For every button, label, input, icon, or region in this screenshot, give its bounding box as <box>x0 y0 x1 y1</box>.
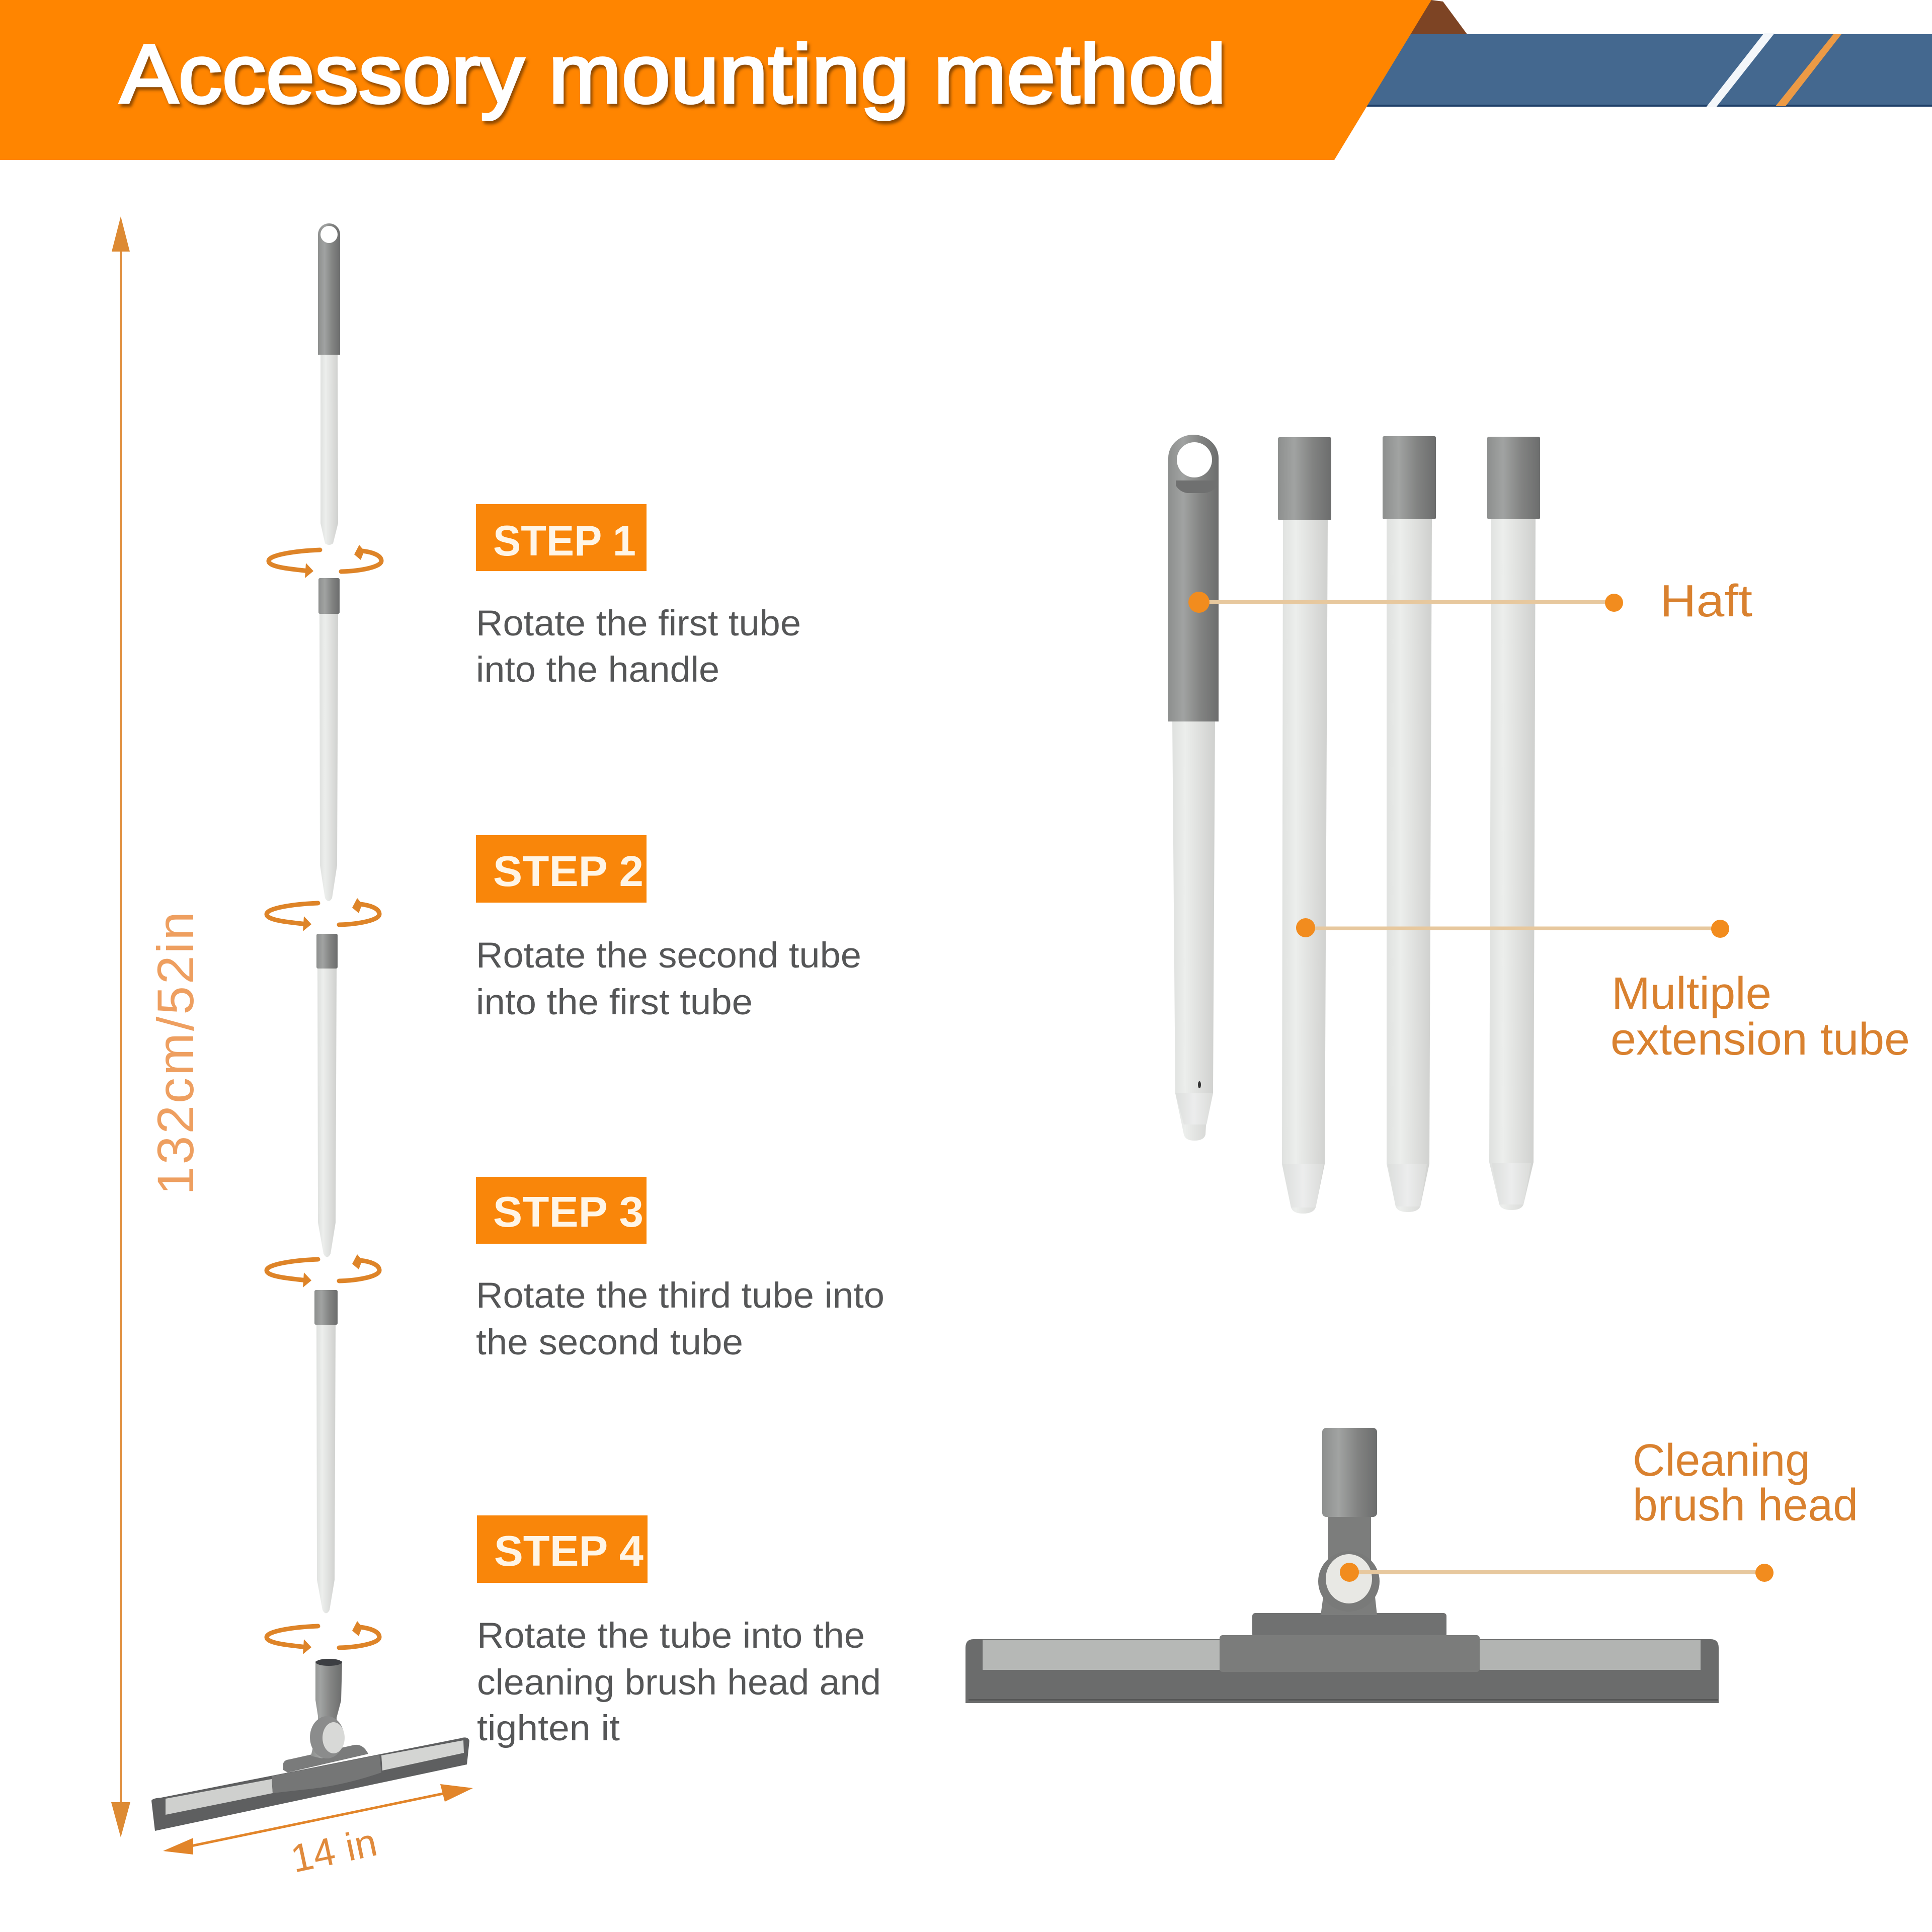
label: multiple extension tube <box>1611 969 1910 1065</box>
step 2: Rotate the second tube <box>476 936 861 976</box>
step 3: STEP 3 <box>493 1188 643 1236</box>
step 4 <box>477 1515 881 1748</box>
callout: extension tube <box>1296 918 1729 938</box>
part: haft <box>1168 435 1219 1141</box>
part: tube 1 <box>1278 437 1331 1214</box>
banner: blue stripe <box>1358 0 1932 107</box>
rotate arrows 3 <box>267 1254 379 1287</box>
step 4: cleaning brush head and <box>477 1663 881 1703</box>
step 3 <box>476 1177 884 1362</box>
assembly: second tube <box>316 934 338 1257</box>
callout: haft <box>1188 592 1623 613</box>
step 3: Rotate the third tube into <box>476 1276 884 1316</box>
step 2: STEP 2 <box>493 848 643 896</box>
height dimension arrow <box>111 216 130 1837</box>
step 1: into the handle <box>476 650 719 690</box>
step 3: the second tube <box>476 1323 743 1362</box>
label: multiple extension tube: extension tube <box>1611 1014 1910 1065</box>
banner: orange title bar <box>0 0 1431 160</box>
step 4: tighten it <box>477 1709 620 1748</box>
step 4: Rotate the tube into the <box>477 1616 865 1656</box>
step 4: STEP 4 <box>494 1527 643 1575</box>
step 1: Rotate the first tube <box>476 604 801 643</box>
callout: brush head <box>1340 1563 1774 1582</box>
step 1 <box>476 504 801 690</box>
part: tube 2 <box>1383 436 1436 1212</box>
assembly: first tube <box>318 578 340 901</box>
step 2: into the first tube <box>476 983 753 1022</box>
step 2 <box>476 835 861 1022</box>
label: cleaning brush head: brush head <box>1633 1480 1858 1531</box>
label: haft: Haft <box>1660 576 1752 626</box>
rotate arrows 1 <box>269 545 381 578</box>
step 1: STEP 1 <box>493 517 636 565</box>
rotate arrows 4 <box>267 1621 379 1654</box>
label: multiple extension tube: Multiple <box>1612 969 1772 1019</box>
part: large cleaning brush head <box>965 1428 1719 1703</box>
width dimension arrow <box>163 1784 473 1855</box>
assembly: handle <box>318 223 340 545</box>
title: Accessory mounting method <box>120 28 1226 121</box>
height label: 132cm/52in <box>147 912 204 1195</box>
label: cleaning brush head <box>1633 1435 1858 1531</box>
assembly: third tube <box>314 1290 338 1613</box>
width label: 14 in <box>287 1820 381 1881</box>
rotate arrows 2 <box>267 898 379 931</box>
label: cleaning brush head: Cleaning <box>1633 1435 1810 1486</box>
part: tube 3 <box>1487 437 1540 1210</box>
assembly: small cleaning brush head <box>151 1659 469 1831</box>
